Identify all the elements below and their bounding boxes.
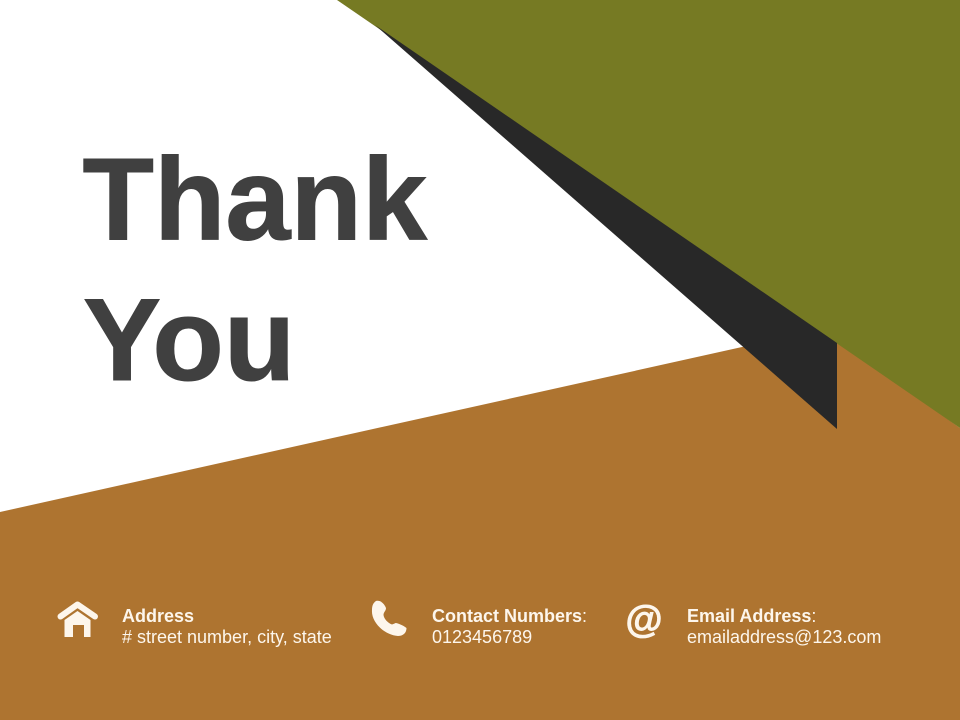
email text: Email Address: <box>687 606 816 626</box>
title <box>82 134 428 405</box>
phone text: Contact Numbers: <box>432 606 587 626</box>
contact: email <box>626 599 881 647</box>
icon: telephone handset <box>372 601 406 636</box>
email text <box>687 606 881 647</box>
icon: house <box>60 604 95 637</box>
title: You <box>83 274 295 405</box>
address text: # street number, city, state <box>122 627 332 647</box>
phone text: 0123456789 <box>432 627 532 647</box>
panel: olive corner triangle <box>337 0 960 428</box>
contact: phone <box>372 601 587 647</box>
dark ribbon shape <box>375 25 837 429</box>
panel: brown lower background <box>0 340 960 720</box>
email text: emailaddress@123.com <box>687 627 881 647</box>
title: Thank <box>82 134 428 264</box>
icon: at sign: @ <box>626 599 663 641</box>
phone text <box>432 606 587 647</box>
contact: address <box>60 604 332 647</box>
address text: Address <box>122 606 194 626</box>
address text <box>122 606 332 647</box>
